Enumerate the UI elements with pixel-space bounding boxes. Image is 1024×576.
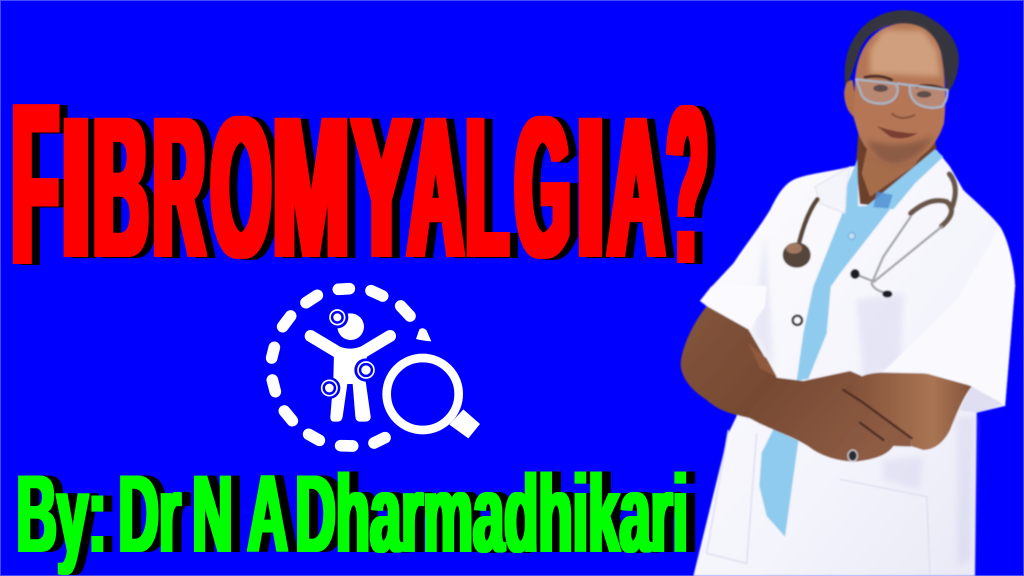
title: Fibromyalgia?: R: [153, 76, 205, 298]
pocket pen tip: [882, 290, 892, 298]
eyes and eyebrows: [865, 76, 945, 98]
shirt collar and placket: [759, 149, 943, 537]
icon: pain target at thigh: [318, 377, 340, 399]
white lab coat: [693, 150, 1015, 576]
lower shirt: [759, 429, 798, 537]
shirt button: [848, 233, 855, 239]
title: Fibromyalgia?: Y: [352, 77, 411, 298]
hand detail: [843, 390, 912, 440]
title: Fibromyalgia?: B: [93, 76, 148, 298]
finger ring: [848, 450, 857, 461]
stethoscope ear tip: [850, 269, 860, 279]
doctor portrait: [681, 10, 1015, 576]
trousers: [763, 523, 787, 576]
icon: magnifying glass: [387, 358, 480, 438]
icon: body pain points with magnifying glass: [272, 289, 480, 446]
ears and face: [844, 24, 945, 166]
byline: By Dr N A Dharmadhikari: N: [192, 452, 233, 575]
title: Fibromyalgia?: ?: [667, 61, 708, 309]
icon: human figure: [311, 313, 390, 422]
coat shading: [753, 233, 977, 567]
upper arm and folded forearm: [681, 306, 911, 462]
coat lapel: [815, 167, 850, 213]
collar shadow: [873, 192, 893, 208]
glasses: [856, 79, 947, 108]
title: Fibromyalgia?: F: [12, 57, 58, 312]
stethoscope chest piece: [783, 242, 811, 268]
byline: By Dr N A Dharmadhikari: [16, 452, 688, 575]
byline: By Dr N A Dharmadhikari: Dharmadhikari: [295, 452, 688, 575]
title: Fibromyalgia?: I: [60, 78, 92, 298]
left sleeve: [700, 286, 767, 328]
title: Fibromyalgia?: I: [576, 76, 605, 298]
coat pocket: [707, 430, 930, 576]
icon: pain target at head: [326, 306, 348, 328]
byline: By Dr N A Dharmadhikari: Dr: [118, 452, 181, 575]
inner arm: [748, 343, 777, 377]
right sleeve: [883, 227, 1015, 406]
title: Fibromyalgia?: O: [211, 76, 271, 298]
byline: By Dr N A Dharmadhikari: A: [247, 452, 288, 575]
title: Fibromyalgia?: [12, 57, 708, 312]
title: Fibromyalgia?: M: [272, 76, 350, 298]
neck: [856, 133, 937, 205]
right forearm: [843, 373, 972, 450]
byline: By Dr N A Dharmadhikari: By:: [16, 452, 107, 575]
stethoscope tubes: [799, 174, 955, 293]
sleeve underside: [959, 387, 1003, 413]
title: Fibromyalgia?: G: [515, 76, 570, 298]
nose and smile: [877, 113, 917, 139]
title: Fibromyalgia?: A: [408, 76, 463, 298]
title: Fibromyalgia?: A: [608, 76, 664, 298]
icon: dashed circle: [272, 289, 431, 446]
coat button: [793, 316, 802, 325]
title: Fibromyalgia?: L: [466, 78, 508, 298]
hair: [845, 10, 959, 95]
icon: pain target at hip: [354, 358, 378, 382]
